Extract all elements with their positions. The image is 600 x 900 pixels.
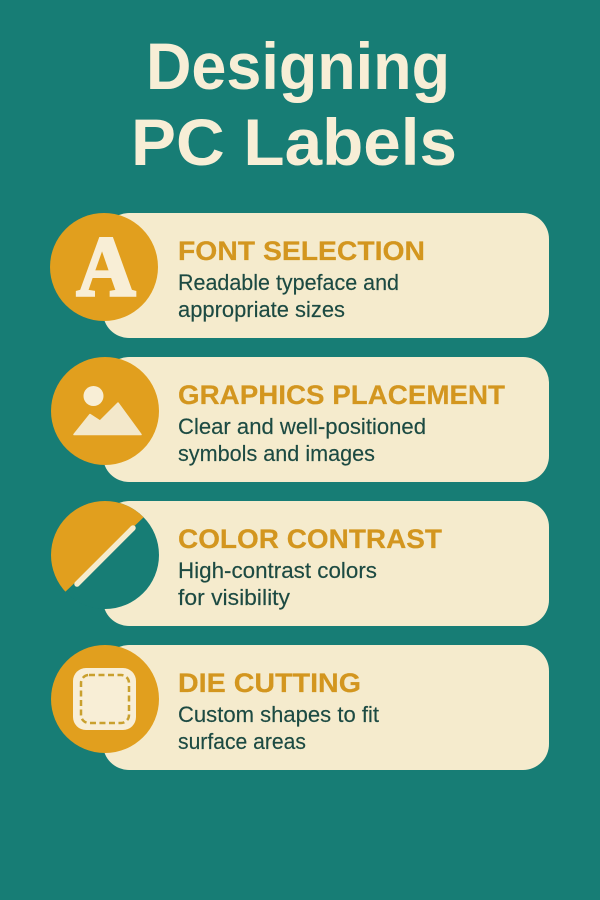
icon: letter A: A (76, 218, 136, 314)
icon: letter A (50, 213, 158, 321)
heading: graphics placement: GRAPHICS PLACEMENT (178, 380, 506, 410)
text: font selection description (178, 270, 399, 322)
panel: die cutting (51, 645, 549, 770)
title (131, 29, 457, 179)
text: graphics placement description: Clear and well-positioned (178, 414, 426, 439)
heading: font selection: FONT SELECTION (178, 236, 425, 266)
panel: color contrast (51, 501, 549, 626)
heading: die cutting: DIE CUTTING (178, 668, 361, 698)
title: Designing (146, 29, 450, 103)
panel: font selection (50, 213, 549, 338)
text: graphics placement description (178, 414, 426, 466)
text: die cutting description: Custom shapes to fit (178, 702, 379, 727)
icon: dashed cut line square (51, 645, 159, 753)
panel: graphics placement (51, 357, 549, 482)
text: color contrast description: for visibility (178, 585, 290, 610)
text: die cutting description (178, 702, 379, 754)
text: font selection description: appropriate sizes (178, 297, 345, 322)
text: font selection description: Readable typeface and (178, 270, 399, 295)
text: color contrast description: High-contrast colors (178, 558, 377, 583)
heading: color contrast: COLOR CONTRAST (178, 524, 443, 554)
text: die cutting description: surface areas (178, 729, 306, 754)
text: graphics placement description: symbols and images (178, 441, 375, 466)
icon: half contrast circle (51, 501, 159, 609)
icon: picture with sun and mountains (51, 357, 159, 465)
text: color contrast description (178, 558, 377, 610)
title: PC Labels (131, 105, 457, 179)
